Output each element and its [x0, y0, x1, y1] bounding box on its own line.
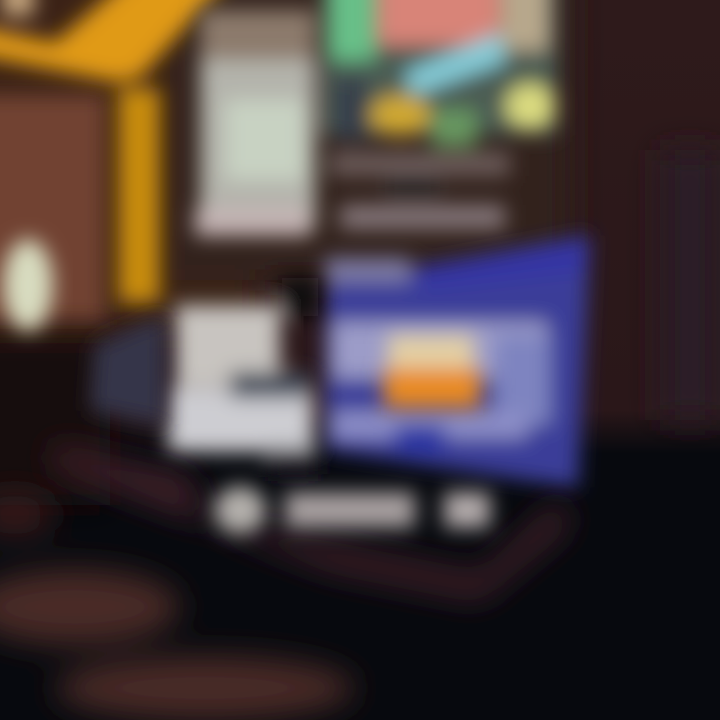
left round light [3, 239, 53, 331]
panel: wood wall left [0, 95, 105, 320]
bright text strip [214, 486, 490, 534]
panel: upper screen [195, 0, 557, 236]
orange highlight [384, 335, 480, 408]
wall shading [0, 0, 720, 505]
counter [50, 445, 570, 600]
left dim panel [90, 315, 165, 425]
yellow ceiling beam [0, 0, 245, 303]
chairs [0, 495, 355, 720]
panel: white cards [168, 278, 318, 474]
panel: blue screen [325, 235, 590, 488]
